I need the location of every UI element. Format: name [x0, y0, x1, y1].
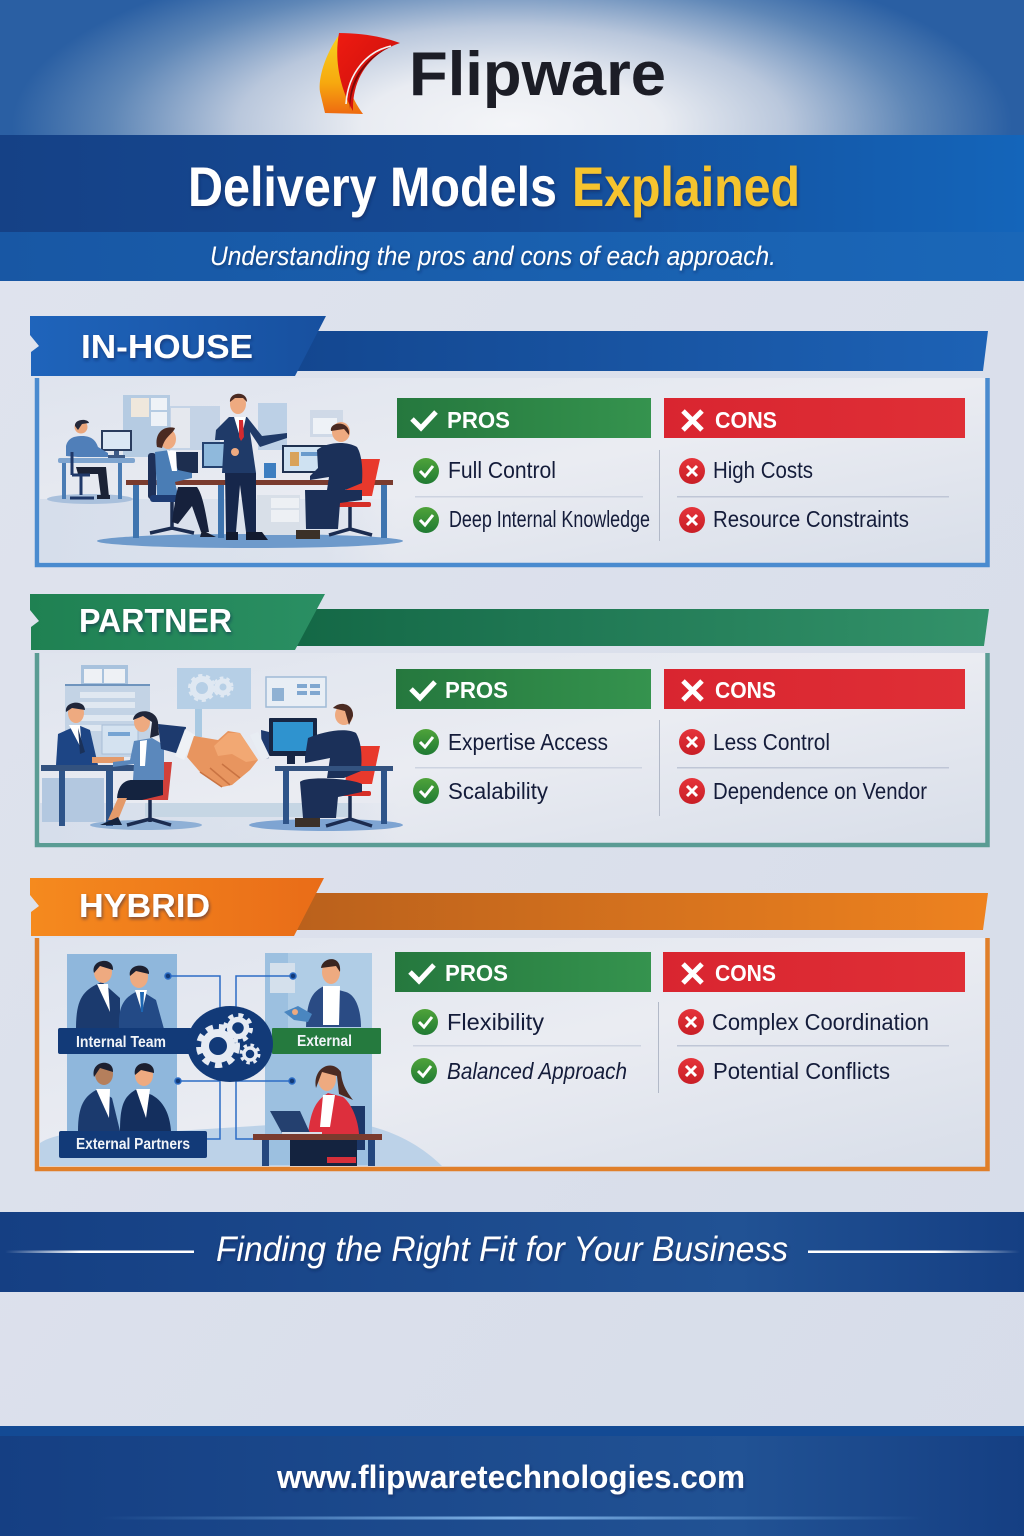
header bar: partner [280, 609, 989, 646]
pro: deep internal knowledge: Deep Internal Knowledge [449, 506, 650, 532]
floor shadows [47, 494, 403, 548]
gear board [177, 668, 251, 737]
illustration: hybrid team network [40, 953, 442, 1166]
label: internal team: Internal Team [76, 1034, 166, 1051]
label: internal team [58, 1028, 192, 1054]
ribbon: in-house [30, 316, 326, 376]
pro: flexibility: Flexibility [447, 1009, 545, 1035]
main desk [126, 442, 393, 538]
label: external partners: External Partners [76, 1136, 190, 1153]
illustration: handshake [40, 665, 403, 843]
floor shadows [90, 819, 403, 831]
left desk worker [58, 420, 135, 499]
con: resource constraints: Resource Constraints [713, 506, 909, 532]
label: external partners [59, 1131, 207, 1158]
pro: scalability: Scalability [448, 778, 548, 804]
woman at laptop [253, 1065, 382, 1166]
connector lines [165, 973, 296, 1139]
con: potential conflicts: Potential Conflicts [713, 1058, 890, 1084]
pros column: in-house [397, 398, 651, 533]
panel: hybrid [30, 878, 988, 1169]
tagline band [0, 1212, 1024, 1292]
pros header: PROS [447, 407, 510, 433]
cons header [664, 669, 965, 709]
handshake hands [158, 724, 270, 787]
pro: balanced approach: Balanced Approach [447, 1058, 627, 1084]
title text: Explained [572, 155, 800, 218]
info board [266, 677, 326, 707]
heading: partner: PARTNER [79, 602, 232, 639]
pros column: hybrid [395, 952, 651, 1084]
label: external [272, 1028, 381, 1054]
illustration: office team [40, 394, 403, 562]
standing presenter [215, 394, 287, 540]
icon: gears hub [187, 1006, 273, 1082]
header bar: hybrid [280, 893, 988, 930]
ribbon: partner [30, 594, 325, 650]
pro: expertise access: Expertise Access [448, 729, 608, 755]
left desk people [41, 703, 172, 826]
subtitle band [0, 232, 1024, 281]
pros header: PROS [445, 960, 508, 986]
subtitle text: Understanding the pros and cons of each approach. [210, 241, 776, 271]
pros header [396, 669, 651, 709]
con: complex coordination: Complex Coordination [712, 1009, 929, 1035]
panel: in-house [30, 316, 988, 565]
external partners people [78, 1063, 171, 1131]
right desk man [269, 704, 393, 827]
cons header [664, 398, 965, 438]
footer band [0, 1426, 1024, 1536]
pros header [395, 952, 651, 992]
cons header: CONS [715, 960, 776, 986]
cons header [663, 952, 965, 992]
pro: full control [413, 457, 556, 484]
website url: www.flipwaretechnologies.com [276, 1459, 745, 1495]
ribbon: hybrid [30, 878, 324, 936]
pros header: PROS [445, 677, 508, 703]
seated woman [148, 427, 216, 537]
title text: Delivery Models [188, 155, 557, 218]
cons column: hybrid [663, 952, 965, 1084]
header with logo [0, 0, 1024, 136]
pro: deep internal knowledge [413, 506, 650, 533]
cons column: in-house [664, 398, 965, 533]
con: dependence on vendor: Dependence on Vendor [713, 778, 927, 804]
internal team people [76, 961, 164, 1029]
tagline text: Finding the Right Fit for Your Business [216, 1230, 788, 1269]
seated man with red chair [296, 422, 380, 539]
logo: Flipware swoosh [320, 33, 400, 114]
header bar: in-house [280, 331, 988, 371]
title text [188, 155, 800, 218]
logo wordmark: Flipware [409, 40, 666, 109]
heading: in-house: IN-HOUSE [81, 328, 253, 365]
cons column: partner [664, 669, 965, 804]
cons header: CONS [715, 407, 777, 433]
title band [0, 135, 1024, 233]
building [65, 665, 150, 757]
panel: partner [30, 594, 989, 845]
con: high costs [679, 457, 813, 484]
pro: full control: Full Control [448, 457, 556, 483]
heading: hybrid: HYBRID [79, 887, 210, 924]
con: high costs: High Costs [713, 457, 813, 483]
external person top [284, 959, 361, 1027]
pros header [397, 398, 651, 438]
con: less control: Less Control [713, 729, 830, 755]
pros column: partner [396, 669, 651, 804]
cons header: CONS [715, 677, 776, 703]
label: external: External [297, 1033, 352, 1050]
